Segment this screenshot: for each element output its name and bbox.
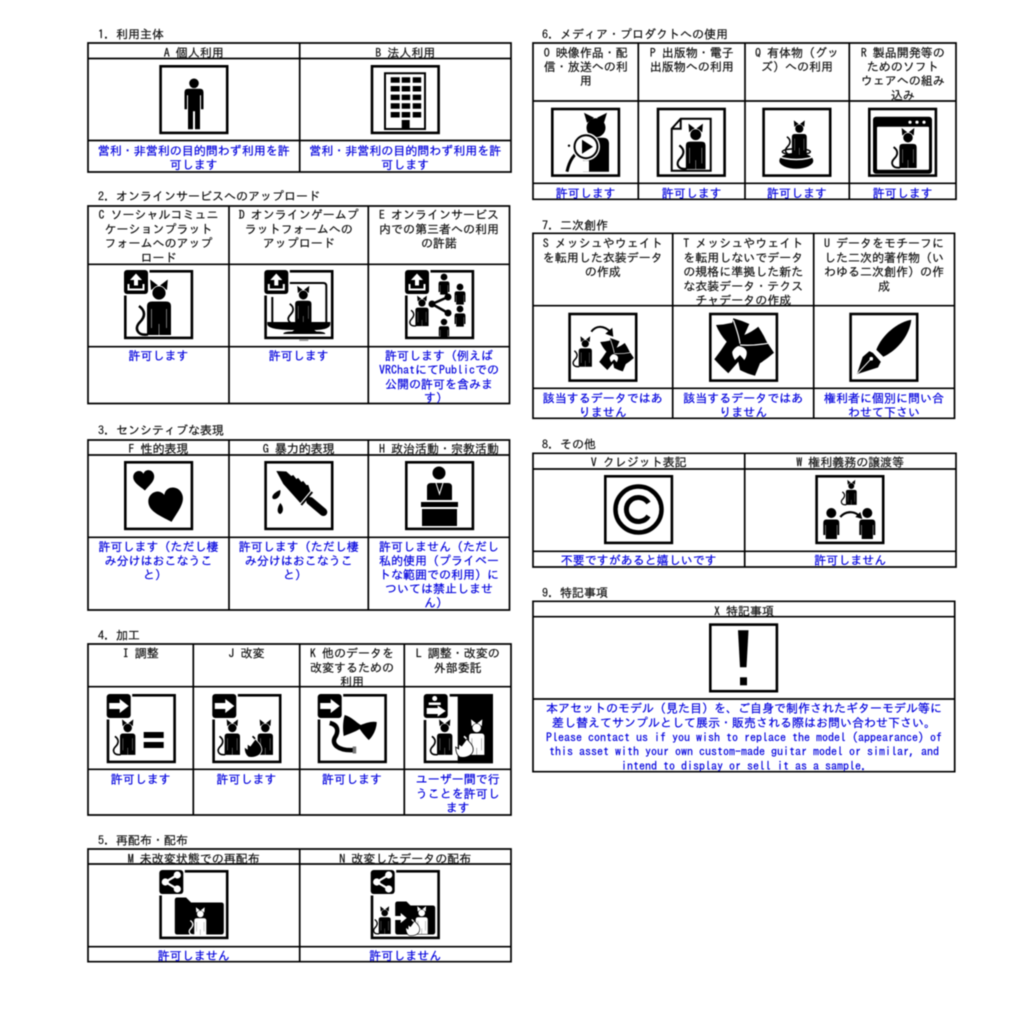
answer N: 許可しません	[369, 950, 441, 962]
icon: modify cat	[211, 692, 280, 762]
table grid	[88, 440, 510, 610]
answer H: 私的使用（プライベー	[379, 554, 499, 567]
heading: 7. 二次創作	[542, 220, 608, 232]
answer G: 許可します（ただし棲	[239, 541, 359, 553]
icon: publication cat	[658, 109, 725, 176]
column header E: 内での第三者への利用	[379, 223, 499, 235]
answer H: ついては禁止しませ	[385, 583, 493, 595]
icon: software window	[869, 109, 936, 176]
icon: person	[161, 66, 227, 133]
section 1: 利用主体	[88, 28, 511, 172]
column header Q: Q 有体物（グッ	[755, 46, 839, 59]
column header X: X 特記事項	[714, 605, 774, 617]
answer T: りません	[719, 406, 767, 418]
column header U: U データをモチーフに	[824, 236, 944, 249]
column header E: E オンラインサービス	[379, 209, 499, 221]
icon: redistribute folder	[158, 868, 227, 938]
icon: video cat	[552, 109, 619, 176]
column header D: ラットフォームへの	[245, 223, 353, 235]
answer E: す）	[424, 392, 448, 404]
column header L: 外部委託	[434, 662, 482, 674]
answer B: 営利・非営利の目的問わず利用を許	[309, 144, 501, 157]
icon: parts ears and tail	[316, 692, 386, 762]
answer S: 該当するデータではあ	[543, 391, 663, 404]
column header P: P 出版物・電子	[650, 47, 734, 59]
icon: clothing	[710, 314, 777, 381]
column header T: T メッシュやウェイト	[683, 237, 803, 249]
answer E: 公開の許可を含みま	[385, 378, 493, 390]
column header D: D オンラインゲームプ	[239, 208, 359, 221]
icon: copyright	[605, 476, 672, 543]
column header C: ロード	[140, 252, 176, 264]
icon: third party share	[404, 268, 473, 339]
column header W: W 権利義務の譲渡等	[796, 455, 904, 468]
column header O: O 映像作品・配	[544, 47, 628, 59]
column header T: チャデータの作成	[695, 294, 791, 307]
table grid	[88, 644, 511, 815]
table grid	[533, 453, 956, 567]
column header R: ウェアへの組み	[861, 75, 945, 87]
answer O: 許可します	[556, 187, 616, 199]
section 7: 二次創作	[533, 220, 954, 418]
icon: rights transfer	[817, 476, 883, 543]
column header G: G 暴力的表現	[263, 443, 335, 455]
column header K: 利用	[340, 676, 364, 688]
column header F: F 性的表現	[128, 443, 188, 455]
special note text: this asset with your own custom-made guitar model or similar, and	[549, 746, 939, 758]
icon: exclamation	[710, 625, 777, 691]
column header B: B 法人利用	[375, 47, 435, 59]
table grid	[533, 43, 956, 199]
section 5: 再配布・配布	[88, 834, 511, 962]
answer L: ユーザー間で行	[416, 774, 500, 786]
icon: upload to game monitor	[263, 268, 332, 341]
answer S: りません	[579, 406, 627, 418]
column header T: を転用しないでデータ	[683, 251, 803, 264]
column header O: 用	[580, 75, 592, 87]
answer G: み分けはおこなうこ	[245, 555, 353, 567]
icon: goods figurine	[764, 109, 830, 176]
answer P: 許可します	[662, 187, 722, 199]
heading: 4. 加工	[98, 630, 140, 642]
answer C: 許可します	[128, 350, 188, 362]
answer K: 許可します	[322, 774, 382, 786]
answer E: VRChatにてPublicでの	[379, 364, 499, 376]
column header R: ためのソフト	[867, 61, 939, 73]
column header S: の作成	[585, 266, 621, 278]
icon: upload cat	[122, 268, 192, 338]
table grid	[533, 601, 955, 772]
column header M: M 未改変状態での再配布	[128, 852, 260, 865]
answer L: ます	[446, 802, 470, 814]
answer V: 不要ですがあると嬉しいです	[561, 554, 717, 567]
column header I: I 調整	[123, 647, 159, 660]
answer A: 営利・非営利の目的問わず利用を許	[98, 144, 290, 157]
heading: 5. 再配布・配布	[98, 834, 188, 846]
icon: distribute modified	[369, 868, 439, 938]
answer R: 許可します	[873, 187, 933, 199]
heading: 1. 利用主体	[98, 28, 164, 40]
answer J: 許可します	[216, 774, 276, 786]
answer I: 許可します	[111, 774, 171, 786]
heading: 3. センシティブな表現	[98, 424, 224, 436]
column header A: A 個人利用	[164, 47, 224, 59]
icon: adjust equals	[105, 692, 175, 762]
answer U: 権利者に個別に問い合	[824, 391, 944, 404]
section 2: オンラインサービスへのアップロード	[88, 190, 510, 404]
icon: external commission	[423, 693, 493, 763]
column header J: J 改変	[228, 648, 264, 660]
special note text: 差し替えてサンプルとして展示・販売される際はお問い合わせ下さい。	[552, 716, 936, 729]
column header C: C ソーシャルコミュニ	[98, 209, 218, 221]
table grid	[88, 849, 511, 962]
answer T: 該当するデータではあ	[683, 391, 803, 404]
column header E: の許諾	[421, 238, 457, 250]
answer U: わせて下さい	[848, 406, 920, 418]
heading: 8. その他	[542, 438, 596, 450]
section 9: 特記事項	[533, 587, 955, 772]
column header T: な衣装データ・テクス	[683, 280, 803, 292]
column header Q: ズ）への利用	[761, 61, 833, 73]
answer W: 許可しません	[814, 555, 886, 567]
answer D: 許可します	[269, 350, 329, 362]
icon: cat to clothing	[570, 314, 636, 381]
table grid	[533, 233, 954, 418]
answer F: み分けはおこなうこ	[104, 555, 212, 567]
table grid	[88, 43, 511, 172]
answer A: 可します	[170, 159, 218, 171]
column header U: 成	[878, 280, 890, 292]
heading: 2. オンラインサービスへのアップロード	[98, 190, 320, 202]
table grid	[88, 206, 510, 404]
column header S: を転用した衣装データ	[543, 251, 663, 264]
answer H: トな範囲での利用）に	[379, 568, 499, 581]
column header T: の規格に準拠した新た	[683, 266, 803, 278]
icon: hearts	[125, 462, 192, 529]
section 8: その他	[533, 438, 956, 567]
icon: fountain pen	[851, 314, 917, 381]
column header N: N 改変したデータの配布	[339, 852, 471, 865]
answer M: 許可しません	[158, 950, 230, 962]
answer F: と）	[143, 569, 167, 581]
answer Q: 許可します	[767, 187, 827, 199]
heading: 6. メディア・プロダクトへの使用	[542, 28, 728, 40]
answer F: 許可します（ただし棲	[98, 541, 218, 553]
column header C: ケーションプラット	[104, 222, 212, 235]
heading: 9. 特記事項	[542, 587, 608, 599]
column header C: フォームへのアップ	[104, 237, 212, 250]
column header O: 信・放送への利	[544, 61, 628, 73]
icon: building	[372, 66, 439, 133]
column header U: した二次的著作物（い	[824, 252, 944, 264]
icon: knife	[266, 462, 332, 529]
column header V: V クレジット表記	[591, 456, 687, 468]
section 6: メディア・プロダクトへの使用	[533, 28, 956, 199]
special note text: intend to display or sell it as a sample.	[621, 760, 867, 772]
column header K: 改変するための	[310, 662, 394, 674]
section 3: センシティブな表現	[88, 424, 510, 610]
special note text: Please contact us if you wish to replace the model (appearance) of	[546, 731, 942, 744]
column header S: S メッシュやウェイト	[543, 237, 663, 249]
section 4: 加工	[88, 630, 511, 815]
answer L: うことを許可し	[416, 788, 500, 800]
column header P: 出版物への利用	[650, 61, 734, 73]
icon: podium speaker	[406, 462, 473, 529]
column header H: H 政治活動・宗教活動	[379, 443, 499, 455]
special note text: 本アセットのモデル（見た目）を、ご自身で制作されたギターモデル等に	[546, 702, 942, 715]
answer B: 可します	[381, 159, 429, 171]
column header U: わゆる二次創作）の作	[824, 266, 944, 278]
answer G: と）	[283, 569, 307, 581]
column header K: K 他のデータを	[310, 647, 394, 660]
column header R: 込み	[891, 90, 915, 102]
answer E: 許可します（例えば	[385, 349, 493, 362]
column header D: アップロード	[263, 237, 335, 250]
answer H: 許可しません（ただし	[379, 541, 499, 553]
column header R: R 製品開発等の	[861, 47, 945, 59]
answer H: ん）	[424, 597, 448, 609]
column header L: L 調整・改変の	[416, 647, 500, 660]
